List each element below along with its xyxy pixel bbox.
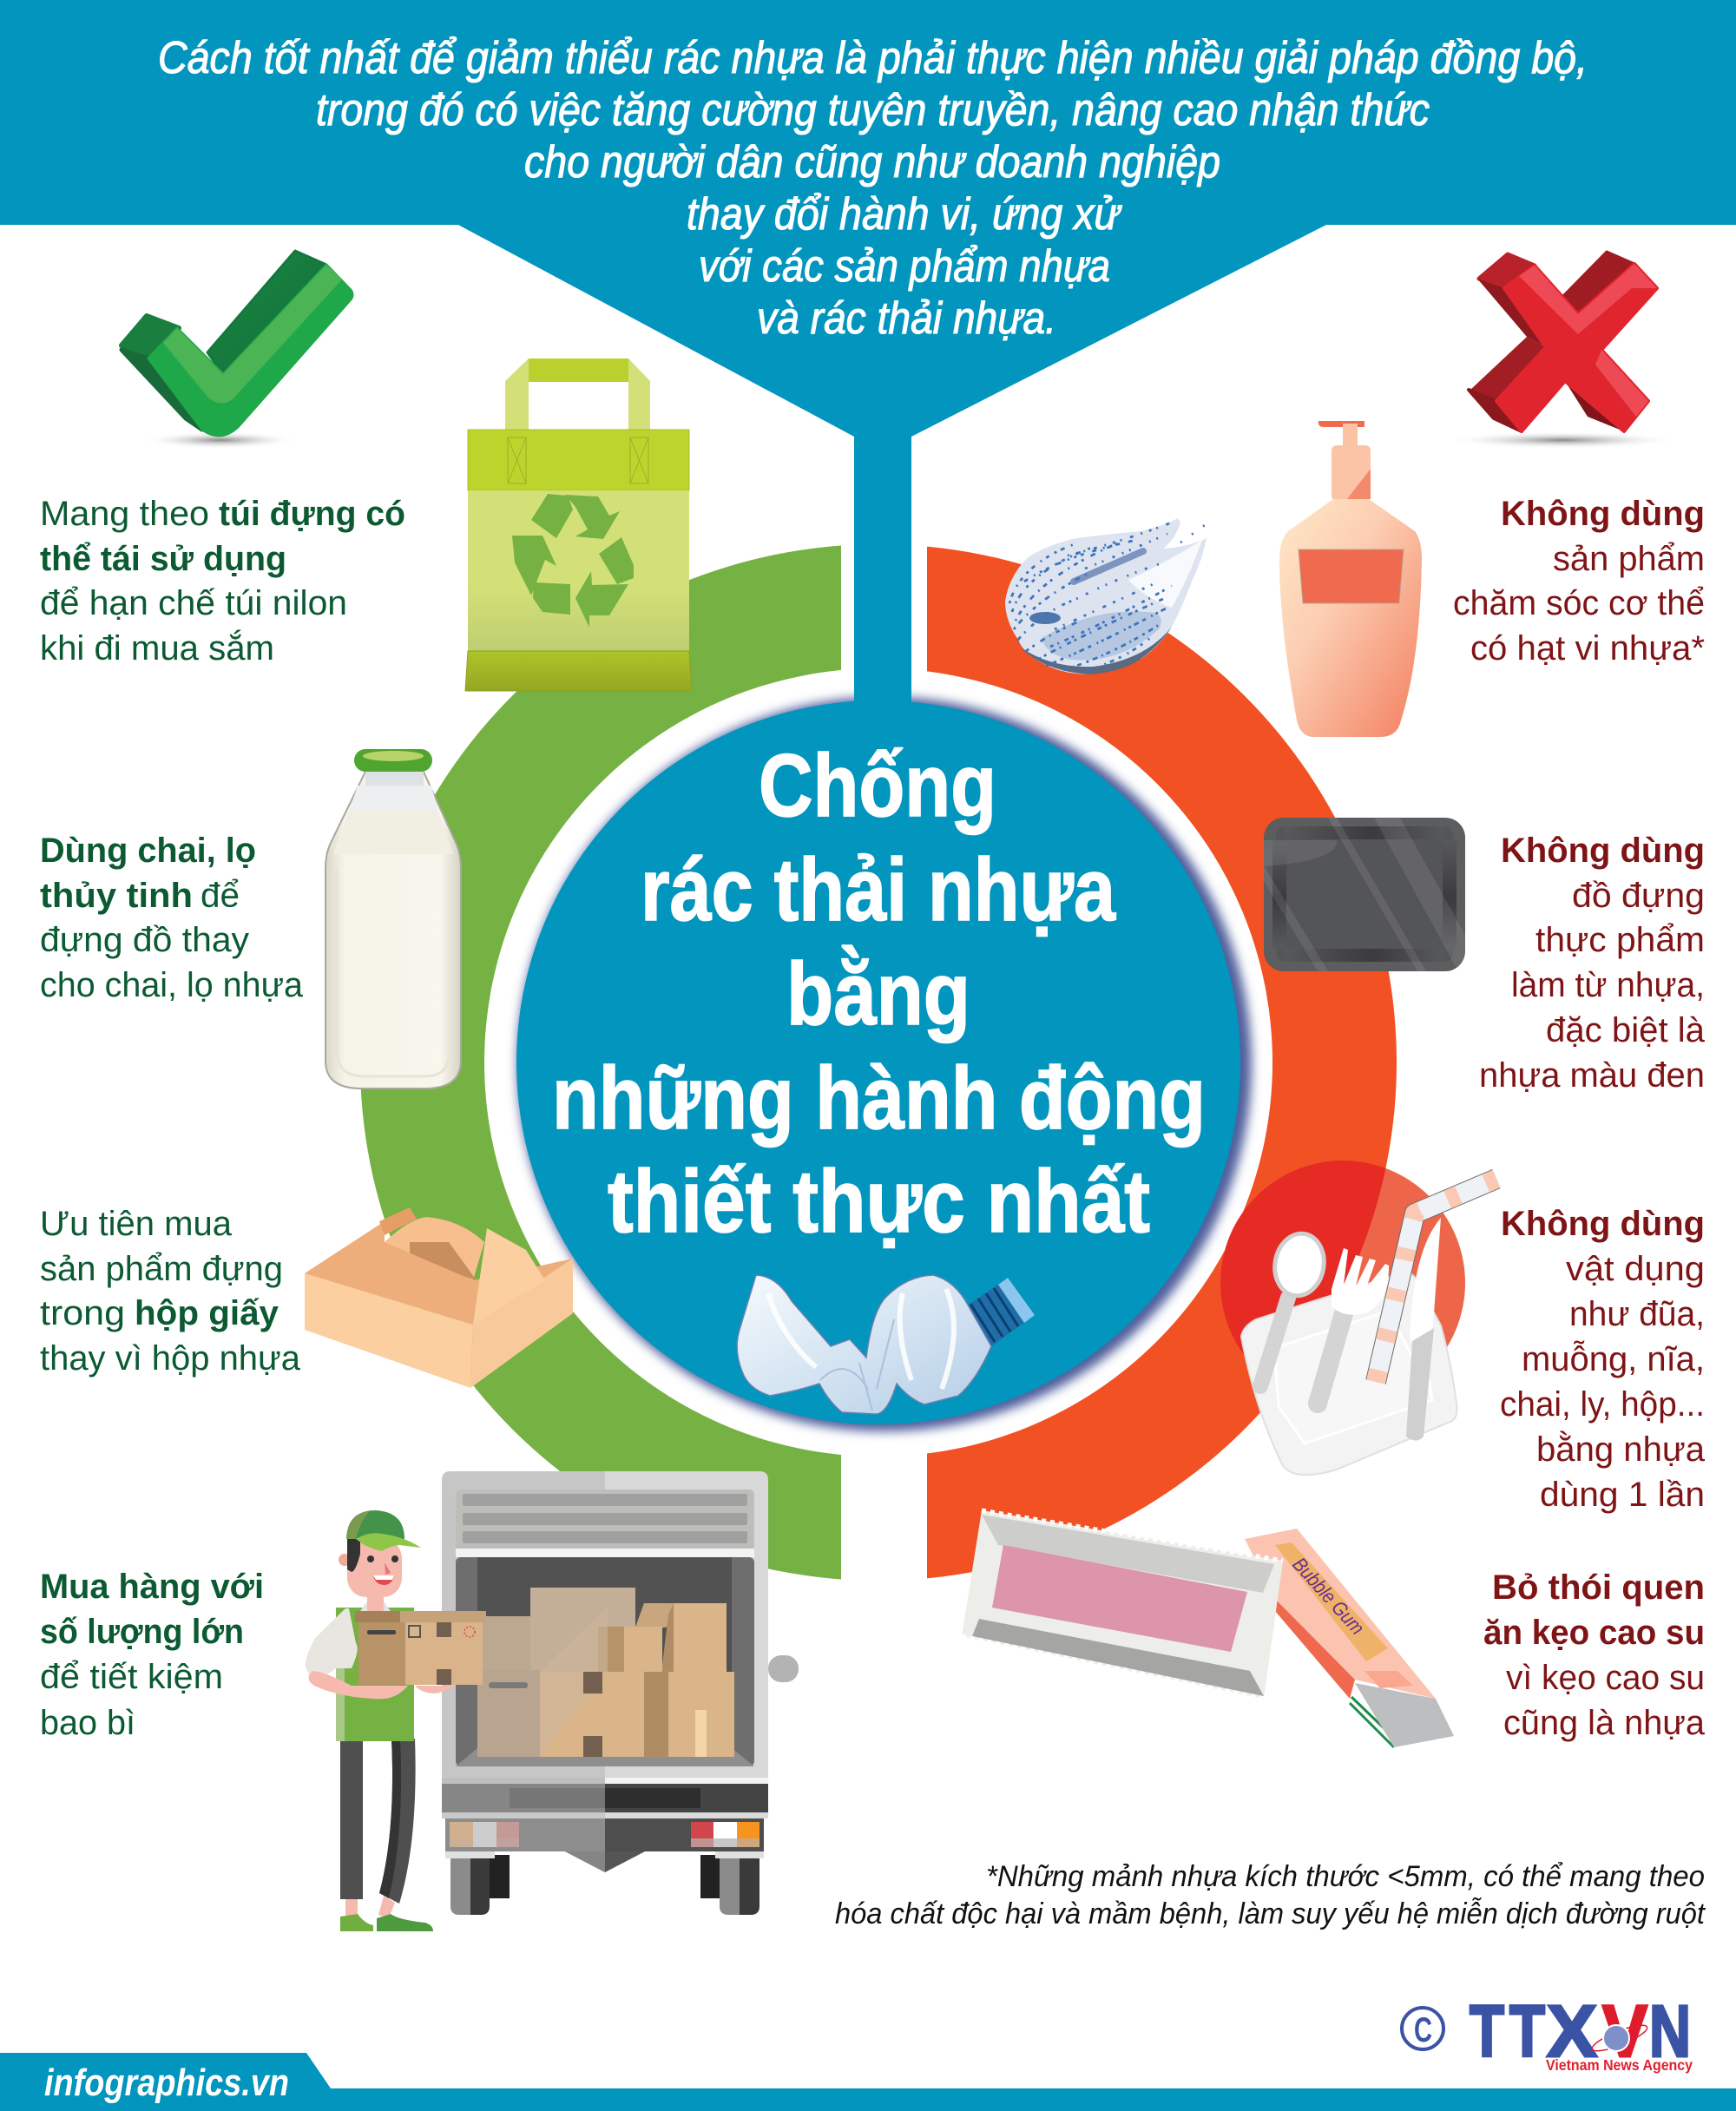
main title [552,736,1206,1251]
icon: disposable cutlery on red circle [1220,1161,1496,1475]
icon: body lotion pump bottle [1279,421,1422,737]
text block: chewing gum: Bỏ thói quen [1492,1568,1705,1607]
text block: single-use items: chai, ly, hộp... [1500,1385,1705,1424]
text block: glass bottles: thủy tinh [40,877,193,915]
text block: bulk buying: số lượng lớn [40,1613,244,1651]
text block: bulk buying: bao bì [40,1704,135,1742]
gum label text: Bubble Gum [1288,1553,1369,1639]
text block: plastic food containers: Không dùng [1501,832,1705,870]
text block: paper boxes: sản phẩm đựng [40,1250,283,1288]
main title: bằng [786,944,970,1043]
top intro text: cho người dân cũng như doanh nghiệp [524,137,1220,187]
top intro text: với các sản phẩm nhựa [699,241,1110,292]
icon: crushed plastic bottle [737,1275,1035,1414]
icon: recycle arrows [512,494,634,628]
text block: glass bottles: Dùng chai, lọ [40,832,256,870]
text block: reusable bag: khi đi mua sắm [40,628,274,667]
soft circle shadow [517,697,1252,1431]
text block: single-use items: Không dùng [1501,1205,1705,1243]
icon: bubble gum [962,1510,1454,1747]
text block: paper boxes: hộp giấy [135,1294,279,1332]
text block: single-use items: như đũa, [1569,1295,1705,1333]
text block: chewing gum: ăn kẹo cao su [1483,1614,1705,1652]
logo: TTXVN: X [1547,1990,1597,2072]
text block: chewing gum: cũng là nhựa [1503,1704,1706,1742]
footnote [835,1860,1706,1930]
icon: reusable shopping bag [465,358,692,691]
text block: bulk buying [40,1568,264,1742]
text block: plastic food containers: làm từ nhựa, [1511,966,1705,1004]
text block: plastic food containers: thực phẩm [1535,921,1705,959]
logo: TTXVN: T [1470,1990,1504,2072]
text block: paper boxes: Ưu tiên mua [40,1205,233,1243]
icon: milk glass bottle [326,749,461,1088]
text block: microplastic care products: sản phẩm [1553,540,1705,578]
text block: single-use items: vật dụng [1566,1250,1705,1288]
footnote: hóa chất độc hại và mầm bệnh, làm suy yếu hệ miễn dịch đường ruột [835,1897,1706,1930]
main title: thiết thực nhất [608,1152,1150,1251]
text block: single-use items: dùng 1 lần [1540,1476,1705,1514]
main title: những hành động [552,1049,1206,1148]
text block: glass bottles: đựng đồ thay [40,921,249,959]
logo: TTXVN: C [1414,2011,1432,2049]
logo: TTXVN: T [1509,1990,1545,2072]
text block: paper boxes [40,1205,301,1378]
held cardboard box [355,1611,486,1685]
main title: Chống [759,736,996,835]
icon: red cross [1445,252,1680,449]
text block: glass bottles [40,832,304,1004]
text block: glass bottles: để [201,877,240,915]
logo: TTXVN: V [1602,1990,1647,2072]
top intro text: Cách tốt nhất để giảm thiểu rác nhựa là phải thực hiện nhiều giải pháp đồng bộ, [158,33,1588,83]
text block: plastic food containers [1479,832,1706,1095]
logo: TTXVN: Vietnam News Agency [1546,2056,1693,2074]
top intro text [158,33,1588,344]
text block: reusable bag: Mang theo [40,495,209,533]
icon: green check mark [122,251,352,449]
logo: TTXVN [1402,1990,1693,2074]
text block: microplastic care products [1453,495,1705,667]
icon: paper box [305,1207,573,1388]
centre blue circle [516,700,1240,1424]
text block: paper boxes: trong [40,1294,125,1332]
illustration: delivery man holding box [306,1510,486,1931]
main title: rác thải nhựa [641,840,1116,939]
text block: reusable bag: để hạn chế túi nilon [40,584,347,622]
text block: single-use items [1500,1205,1706,1514]
icon: black plastic tray [1264,818,1465,971]
green arc ring [361,545,841,1580]
text block: single-use items: bằng nhựa [1536,1430,1706,1469]
text block: single-use items: muỗng, nĩa, [1522,1339,1705,1378]
top intro text: thay đổi hành vi, ứng xử [687,189,1122,240]
text block: microplastic care products: Không dùng [1501,495,1705,533]
top intro text: trong đó có việc tăng cường tuyên truyền, nâng cao nhận thức [316,85,1430,135]
top intro text: và rác thải nhựa. [757,293,1056,344]
illustration: delivery truck with boxes [442,1471,799,1915]
text block: reusable bag [40,495,405,667]
text block: microplastic care products: chăm sóc cơ thể [1453,584,1705,622]
text block: glass bottles: cho chai, lọ nhựa [40,966,304,1004]
text block: plastic food containers: đặc biệt là [1546,1011,1706,1049]
text block: bulk buying: Mua hàng với [40,1568,264,1606]
orange arc ring [927,547,1397,1578]
top banner with funnel [0,0,1736,720]
footer bar with source tab: infographics.vn [44,2062,289,2104]
cargo boxes [477,1588,734,1757]
text block: paper boxes: thay vì hộp nhựa [40,1339,301,1378]
text block: microplastic care products: có hạt vi nhựa* [1470,629,1705,667]
text block: reusable bag: thể tái sử dụng [40,540,286,578]
logo: TTXVN: N [1649,1990,1691,2072]
footer bar with source tab [0,2053,1736,2111]
white ring around centre circle [484,668,1272,1457]
text block: bulk buying: để tiết kiệm [40,1658,223,1696]
footnote: *Những mảnh nhựa kích thước <5mm, có thể mang theo [986,1860,1705,1893]
icon: scrub cream with microbeads [1005,518,1211,674]
text block: reusable bag: túi đựng có [219,495,405,533]
text block: chewing gum: vì kẹo cao su [1506,1659,1705,1697]
text block: plastic food containers: nhựa màu đen [1479,1056,1705,1095]
text block: chewing gum [1483,1568,1706,1742]
text block: plastic food containers: đồ đựng [1572,877,1705,915]
